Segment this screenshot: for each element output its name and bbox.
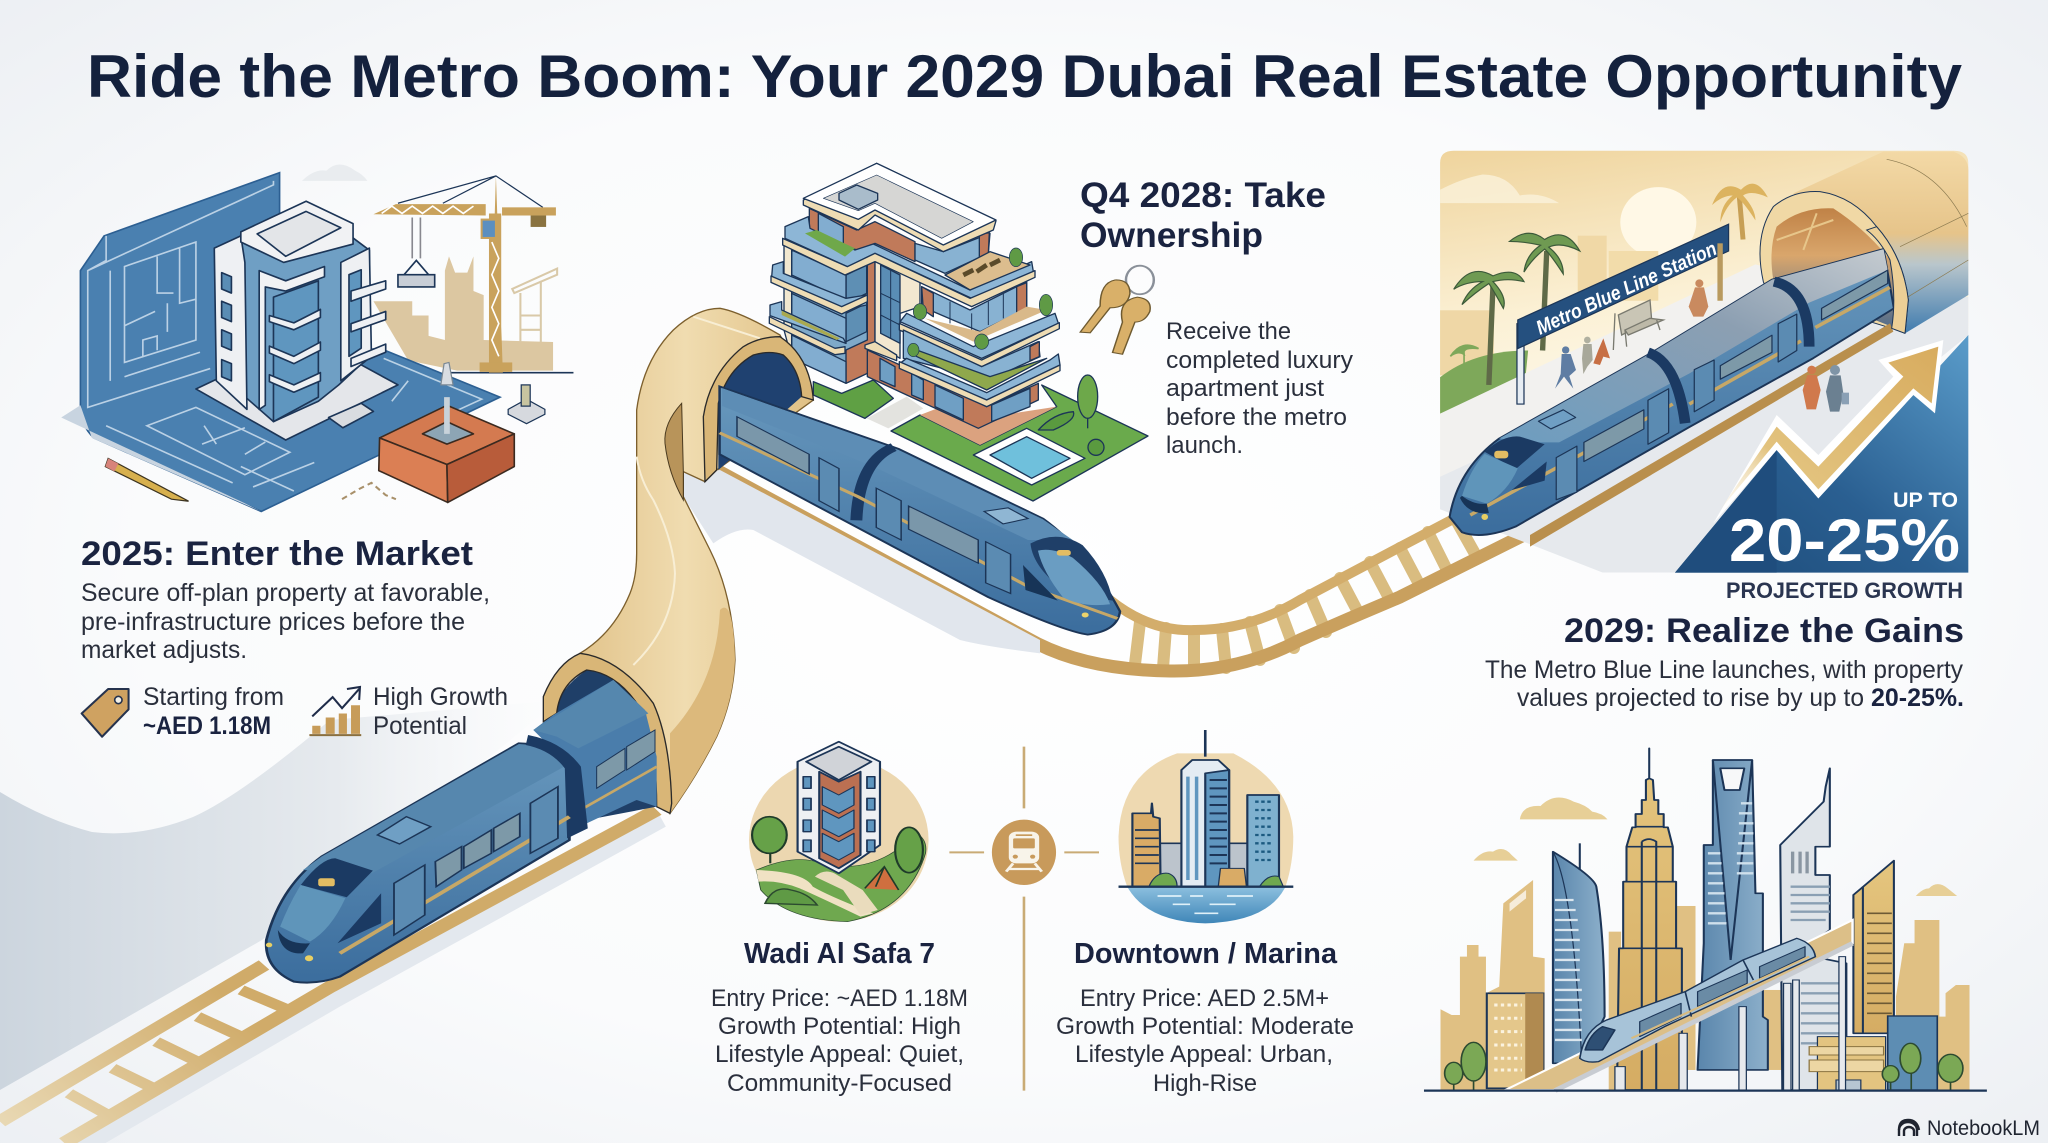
building: lower left bbox=[1487, 993, 1543, 1088]
station train roof bbox=[1499, 249, 1888, 442]
left wing slabs bbox=[772, 262, 867, 309]
text: price: Starting from bbox=[143, 683, 284, 711]
text: Downtown details: Growth Potential: Moderate bbox=[1056, 1013, 1354, 1040]
icon: price tag bbox=[82, 689, 129, 737]
ground floor bbox=[867, 350, 1038, 428]
lower ground bbox=[1440, 297, 1968, 572]
ribbon shading bbox=[670, 608, 735, 813]
roof bbox=[803, 163, 996, 252]
elevated rail bbox=[1505, 920, 1853, 1091]
gold background buildings bbox=[1441, 880, 1970, 1090]
arrow backdrop bbox=[1675, 335, 1968, 573]
tower: curved blue bbox=[1553, 852, 1605, 1063]
left wing body bbox=[785, 245, 875, 383]
text: Q4 2028 description: apartment just bbox=[1166, 375, 1324, 402]
text: growth potential: High Growth bbox=[373, 683, 508, 711]
track shadow bbox=[683, 470, 1040, 653]
growth stat: PROJECTED GROWTH bbox=[1726, 578, 1963, 603]
ribbon body bbox=[580, 308, 813, 813]
tan background buildings bbox=[373, 256, 553, 371]
text: Wadi Al Safa details bbox=[711, 985, 968, 1097]
heading: 2025: 2025: Enter the Market bbox=[81, 535, 473, 573]
tunnel ring front limb bbox=[1867, 227, 1908, 333]
ground line bbox=[449, 371, 573, 375]
station sign bbox=[1517, 224, 1729, 404]
lower train windows bbox=[377, 787, 558, 935]
track bed bbox=[1530, 323, 1893, 547]
text: Downtown details: Lifestyle Appeal: Urban, bbox=[1075, 1041, 1333, 1068]
train stripe bbox=[720, 433, 1118, 619]
small column block bbox=[508, 385, 545, 424]
text: 2025 description: Secure off-plan property at favorable, bbox=[81, 579, 490, 607]
train: middle bbox=[720, 386, 1120, 635]
scaffold bbox=[512, 269, 557, 342]
crane bbox=[373, 176, 556, 373]
icon: Downtown / Marina towers bbox=[1119, 730, 1293, 923]
text: growth potential: Potential bbox=[373, 712, 467, 740]
trees bbox=[1038, 375, 1104, 455]
clouds bbox=[1474, 798, 1957, 896]
text: Wadi Al Safa details: Growth Potential: High bbox=[718, 1013, 961, 1040]
station sign text: Metro Blue Line Station bbox=[1533, 238, 1720, 340]
logo text: NotebookLM bbox=[1927, 1117, 2040, 1140]
elevated train bbox=[1580, 938, 1815, 1062]
top floor bbox=[809, 208, 915, 262]
lower railway track bbox=[0, 810, 666, 1143]
text: Q4 2028 description: completed luxury bbox=[1166, 347, 1353, 374]
heading: Downtown / Marina: Downtown / Marina bbox=[1074, 938, 1338, 970]
tunnel front and growth arrow bbox=[1675, 227, 1968, 573]
blueprint sheet bbox=[80, 173, 500, 511]
cloud bbox=[302, 164, 367, 181]
slab B bbox=[900, 354, 1060, 400]
tower: gold right bbox=[1853, 861, 1894, 1033]
upper curving railway track bbox=[720, 472, 1530, 671]
text: 2025 description: market adjusts. bbox=[81, 636, 247, 664]
clouds and sun bbox=[1440, 174, 1696, 375]
lawn, path and pool bbox=[813, 380, 1148, 501]
tunnel tube bbox=[1793, 152, 1968, 333]
text: price bbox=[143, 683, 284, 740]
growth arrow bbox=[1713, 340, 1943, 523]
green hill bbox=[1440, 350, 1528, 414]
lower tunnel mouth bbox=[557, 670, 657, 820]
pencil bbox=[105, 458, 189, 501]
heading: Q4 2028: Q4 2028: Take bbox=[1080, 176, 1326, 215]
text: Wadi Al Safa details: Community-Focused bbox=[727, 1070, 952, 1097]
train windows bbox=[737, 417, 1028, 594]
heading: 2029: 2029: Realize the Gains bbox=[1564, 612, 1964, 650]
right wing floor A bbox=[922, 282, 1027, 332]
buildings: lower right bbox=[1809, 1016, 1937, 1090]
growth stat: UP TO bbox=[1893, 489, 1958, 512]
tunnel, track and arrow scene bbox=[1530, 152, 1968, 547]
text: Downtown details: Entry Price: AED 2.5M+ bbox=[1080, 985, 1329, 1012]
text: Q4 2028 description: before the metro bbox=[1166, 404, 1347, 431]
panel: station scene background bbox=[1440, 151, 1968, 572]
text: Q4 2028 description: launch. bbox=[1166, 432, 1243, 459]
ground line bbox=[1424, 1087, 1987, 1094]
station train connectors bbox=[1648, 282, 1809, 423]
text: 2025 description bbox=[81, 579, 490, 664]
tunnel interior bbox=[1771, 208, 1894, 327]
trees bbox=[1445, 1042, 1963, 1090]
text: 2029 description: 20-25%. bbox=[1871, 684, 1964, 712]
upper band and terraces bbox=[785, 217, 1033, 298]
text: 2029 description: values projected to rise by up to bbox=[1517, 684, 1864, 712]
lower train connector bbox=[526, 735, 588, 838]
tunnel ring bbox=[1760, 192, 1908, 333]
comparison icons bbox=[749, 730, 1293, 1091]
station train nose bbox=[1485, 436, 1545, 469]
foundation block bbox=[379, 405, 514, 502]
heading: Q4 2028 bbox=[1080, 176, 1326, 255]
palm trees bbox=[1450, 184, 1768, 385]
text: 2029 description: The Metro Blue Line launches, with property bbox=[1485, 656, 1963, 684]
text: 2029 description bbox=[1485, 656, 1964, 712]
tower: gold art deco bbox=[1617, 748, 1682, 1090]
grey hill backdrop bbox=[0, 700, 560, 1090]
text: price: ~AED 1.18M bbox=[143, 712, 271, 740]
upper tunnel mouth bbox=[718, 352, 802, 470]
text: Wadi Al Safa details: Lifestyle Appeal: Quiet, bbox=[715, 1041, 964, 1068]
text: Downtown details bbox=[1056, 985, 1354, 1097]
train roof bbox=[722, 388, 1073, 540]
panel: completed apartment building bbox=[769, 163, 1148, 501]
right wing floor B bbox=[903, 330, 1040, 380]
icon: metro badge bbox=[992, 820, 1056, 885]
panel: 2025 illustration bbox=[61, 164, 573, 737]
train: lower bbox=[266, 735, 588, 983]
tower: blue tapered bbox=[1698, 760, 1768, 1070]
lower train rear car bbox=[533, 680, 657, 823]
station train stripe bbox=[1470, 287, 1890, 515]
platform bbox=[1440, 264, 1855, 509]
growth stat: 20-25% bbox=[1729, 507, 1960, 574]
slab A bbox=[900, 313, 1058, 358]
main building bbox=[196, 201, 398, 440]
text: Q4 2028 description: Receive the bbox=[1166, 318, 1291, 345]
train nose bbox=[1030, 537, 1113, 601]
growth stat bbox=[1726, 489, 1963, 603]
sky bbox=[1440, 151, 1968, 416]
plants bbox=[908, 248, 1053, 357]
text: Q4 2028 description bbox=[1166, 318, 1353, 459]
icon: growth chart bbox=[309, 687, 361, 735]
icon: keys bbox=[1080, 266, 1154, 354]
title: Ride the Metro Boom: Your 2029 Dubai Real Estate Opportunity bbox=[87, 43, 1963, 110]
heading: Q4 2028: Ownership bbox=[1080, 216, 1263, 255]
heading: Wadi Al Safa 7: Wadi Al Safa 7 bbox=[744, 938, 935, 970]
divider bbox=[949, 747, 1099, 1091]
text: 2025 description: pre-infrastructure prices before the bbox=[81, 608, 465, 636]
debris bbox=[342, 483, 396, 499]
icon: NotebookLM logo bbox=[1899, 1120, 1919, 1136]
train: station bbox=[1450, 249, 1894, 535]
bench bbox=[1613, 300, 1663, 350]
tower: grey angled bbox=[1780, 768, 1846, 1090]
couple on platform bbox=[1803, 365, 1849, 412]
centre column bbox=[875, 253, 920, 358]
skyline illustration bbox=[1424, 748, 1987, 1091]
text: growth potential bbox=[373, 683, 508, 740]
passengers on platform bbox=[1555, 279, 1708, 389]
text: Downtown details: High-Rise bbox=[1153, 1070, 1257, 1097]
blueprint drawings bbox=[88, 181, 482, 491]
ribbon tunnel bbox=[533, 308, 1040, 823]
lower train roof bbox=[303, 744, 567, 873]
station train windows bbox=[1538, 270, 1888, 500]
lower train stripe bbox=[340, 817, 569, 953]
lower train nose bbox=[301, 858, 373, 897]
icon: Wadi Al Safa community bbox=[749, 742, 929, 922]
train car connector bbox=[856, 447, 894, 520]
text: Wadi Al Safa details: Entry Price: ~AED 1.18M bbox=[711, 985, 968, 1012]
